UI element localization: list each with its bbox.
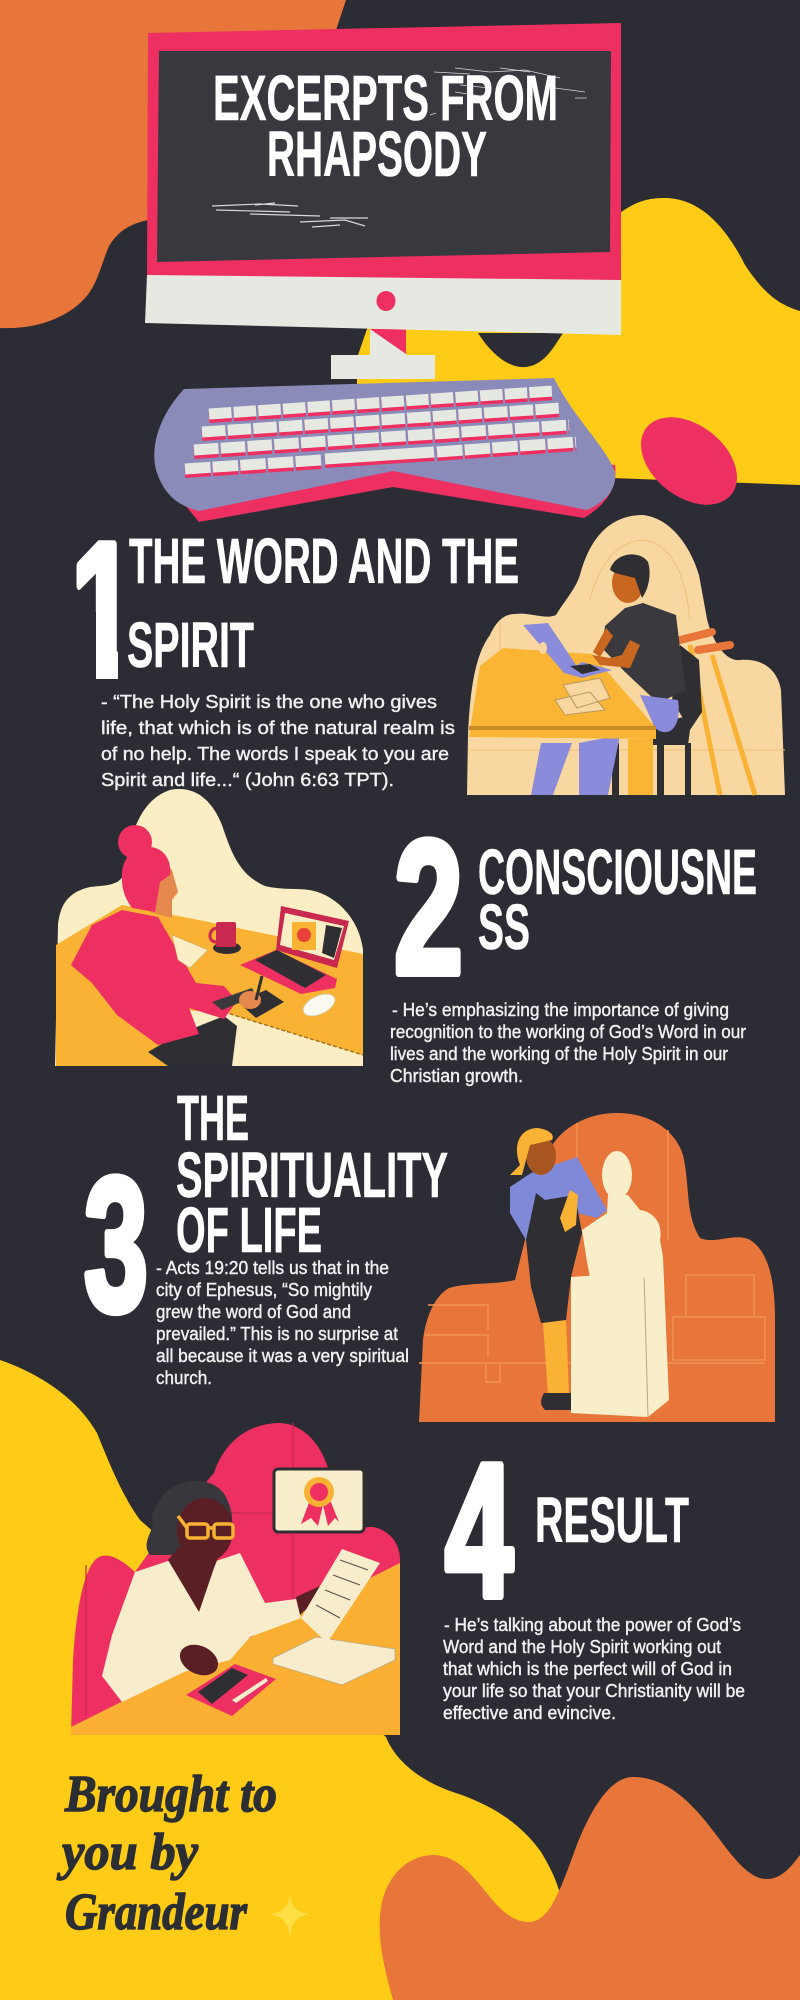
heading 3: OF LIFE bbox=[176, 1194, 322, 1266]
body 1: - “The Holy Spirit is the one who gives bbox=[101, 692, 437, 712]
glasses bbox=[178, 1516, 233, 1538]
screen scratches bbox=[212, 68, 587, 227]
heading 3: SPIRITUALITY bbox=[176, 1139, 448, 1211]
statue bust bbox=[582, 1151, 663, 1278]
footer credit: you by bbox=[56, 1824, 199, 1881]
desk bbox=[469, 648, 656, 739]
number 4: 4 bbox=[445, 1425, 513, 1637]
number 1: 1 bbox=[71, 504, 136, 716]
body 2: - He’s emphasizing the importance of giving bbox=[392, 1000, 729, 1020]
body 3: prevailed.” This is no surprise at bbox=[156, 1324, 398, 1344]
paper in hand bbox=[301, 1549, 380, 1643]
window frames bbox=[86, 1423, 345, 1715]
hands bbox=[175, 1585, 322, 1681]
footer credit bbox=[56, 1766, 277, 1941]
monitor screen bbox=[157, 51, 611, 262]
body 3: - Acts 19:20 tells us that in the bbox=[156, 1258, 389, 1278]
illustration: sculptor bbox=[419, 1113, 775, 1422]
heading 3: THE bbox=[177, 1082, 249, 1154]
shirt bbox=[510, 1157, 607, 1240]
apron bbox=[526, 1193, 582, 1323]
certificate frame bbox=[274, 1469, 364, 1532]
body 1: life, that which is of the natural realm is bbox=[101, 718, 455, 738]
body 3: city of Ephesus, “So mightily bbox=[156, 1280, 372, 1300]
heading 1: SPIRIT bbox=[127, 609, 254, 681]
heading 4: RESULT bbox=[535, 1484, 689, 1556]
desk leg bbox=[628, 739, 653, 795]
heading 2: SS bbox=[478, 891, 530, 963]
body 3: church. bbox=[156, 1368, 212, 1388]
tablet and hand bbox=[212, 976, 284, 1018]
paper stack bbox=[273, 1637, 395, 1685]
number 2: 2 bbox=[394, 802, 463, 1014]
chair back bbox=[672, 645, 702, 730]
icon: sparkles bbox=[270, 1893, 309, 1937]
stool bbox=[612, 715, 692, 795]
body 1: of no help. The words I speak to you are bbox=[101, 744, 449, 764]
neck and head bbox=[168, 1498, 233, 1612]
keyboard bbox=[154, 378, 615, 522]
body 4: your life so that your Christianity will be bbox=[443, 1681, 745, 1701]
section 4 bbox=[71, 1423, 745, 1735]
chair bbox=[56, 980, 214, 1066]
head bbox=[612, 563, 644, 603]
shoe bbox=[541, 1393, 571, 1410]
icon: mouse bbox=[624, 399, 754, 523]
title: RHAPSODY bbox=[267, 118, 487, 190]
dark notch beneath monitor bbox=[478, 333, 563, 367]
icon: desktop computer bbox=[145, 23, 621, 522]
torso bbox=[602, 603, 686, 703]
hair bbox=[610, 554, 650, 598]
laptop bbox=[240, 906, 349, 994]
body 2: recognition to the working of God’s Word in our bbox=[390, 1022, 746, 1042]
body 4: Word and the Holy Spirit working out bbox=[443, 1637, 721, 1657]
illustration: person at laptop with crutches bbox=[467, 515, 785, 795]
note paper bbox=[172, 935, 208, 968]
legs bbox=[531, 735, 620, 795]
illustration: woman with calculator bbox=[71, 1423, 400, 1735]
papers bbox=[555, 678, 610, 715]
body 3: grew the word of God and bbox=[156, 1302, 351, 1322]
arms bbox=[592, 628, 640, 668]
ribbon bbox=[301, 1500, 339, 1526]
body 3 bbox=[156, 1258, 409, 1388]
heading 1: THE WORD AND THE bbox=[129, 525, 519, 597]
sweater bbox=[71, 910, 237, 1045]
desk bbox=[56, 905, 363, 1055]
monitor stand bbox=[331, 329, 435, 379]
body 4: - He’s talking about the power of God’s bbox=[444, 1615, 741, 1635]
body 2 bbox=[390, 1000, 746, 1086]
section 2 bbox=[55, 789, 757, 1086]
desk bbox=[71, 1563, 400, 1735]
illustration: person at design laptop bbox=[55, 789, 363, 1066]
title bbox=[213, 62, 558, 190]
hip bbox=[640, 695, 679, 732]
sculptor bbox=[510, 1128, 607, 1410]
keyboard body bbox=[154, 378, 615, 511]
footer credit: Grandeur bbox=[65, 1884, 248, 1941]
backdrop bbox=[419, 1113, 775, 1422]
key tops bbox=[185, 391, 576, 469]
heading 1 bbox=[127, 525, 519, 681]
crutches bbox=[680, 632, 755, 795]
section 1 bbox=[71, 504, 785, 795]
backdrop window lines bbox=[468, 540, 785, 750]
face bbox=[526, 1137, 556, 1175]
keyboard underside bbox=[156, 440, 615, 522]
key shadows bbox=[185, 394, 576, 472]
hair bbox=[147, 1481, 232, 1555]
body 4: that which is the perfect will of God in bbox=[443, 1659, 732, 1679]
blob: yellow top right bbox=[357, 198, 800, 485]
backdrop bbox=[71, 1423, 400, 1735]
blob: orange top left bbox=[0, 0, 346, 328]
heading 2 bbox=[478, 836, 757, 963]
title: EXCERPTS FROM bbox=[213, 62, 558, 134]
mug bbox=[210, 922, 241, 954]
footer credit: Brought to bbox=[64, 1766, 277, 1823]
body 4 bbox=[443, 1615, 745, 1723]
laptop bbox=[523, 623, 612, 678]
shelves and drawers bbox=[419, 1123, 765, 1382]
calculator bbox=[186, 1664, 276, 1716]
body 3: all because it was a very spiritual bbox=[156, 1346, 409, 1366]
number 3: 3 bbox=[84, 1139, 148, 1351]
body 1: Spirit and life...“ (John 6:63 TPT). bbox=[101, 770, 394, 790]
arm bbox=[560, 1190, 578, 1232]
body 2: lives and the working of the Holy Spirit in our bbox=[390, 1044, 728, 1064]
monitor chin bbox=[145, 275, 621, 335]
desk edge bbox=[224, 1012, 363, 1055]
trousers bbox=[148, 1016, 237, 1066]
pedestal bbox=[571, 1257, 669, 1417]
computer mouse bbox=[300, 990, 338, 1020]
blob: yellow bottom left bbox=[0, 1360, 600, 2000]
leg bbox=[543, 1320, 569, 1395]
bandana bbox=[510, 1128, 553, 1175]
body 2: Christian growth. bbox=[390, 1066, 523, 1086]
blob: orange bottom right bbox=[380, 1777, 800, 2000]
power button bbox=[376, 291, 396, 311]
body 4: effective and evincive. bbox=[443, 1703, 616, 1723]
head and hair bbox=[118, 825, 178, 918]
body 1 bbox=[101, 692, 455, 790]
section 3 bbox=[84, 1082, 775, 1422]
monitor frame bbox=[147, 23, 621, 282]
backdrop bbox=[467, 515, 785, 795]
heading 3 bbox=[176, 1082, 448, 1266]
blouse bbox=[102, 1553, 301, 1702]
rosette bbox=[304, 1477, 334, 1507]
backdrop bbox=[55, 789, 363, 1066]
